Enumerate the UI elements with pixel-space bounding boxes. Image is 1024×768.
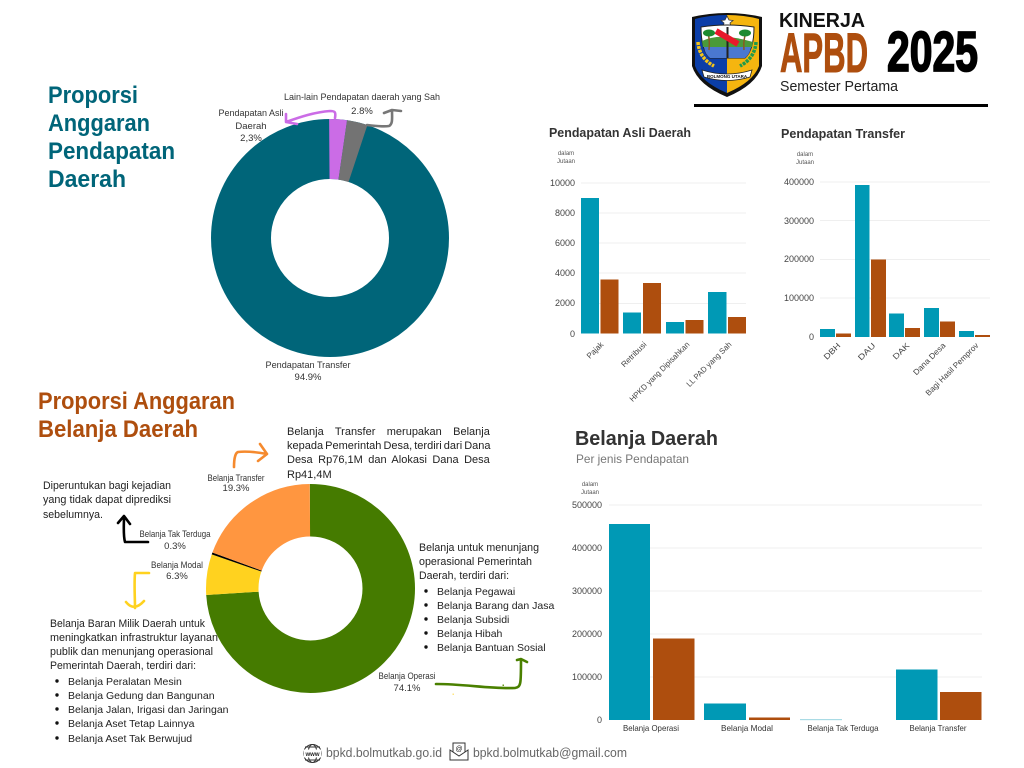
bar chart: Belanja Daerah: 300000	[572, 586, 602, 596]
bar chart: Pendapatan Transfer: 300000	[784, 216, 814, 226]
arrow: grey to Lain-lain Pendapatan	[367, 110, 401, 126]
list: jenis belanja modal: Belanja Aset Tak Berwujud	[68, 733, 192, 745]
label: Pendapatan Transfer: 94.9%	[295, 372, 322, 383]
label: Belanja Transfer	[208, 473, 264, 494]
label: Pendapatan Asli Daerah: Daerah	[235, 121, 267, 132]
text block: Belanja Operasi description: Belanja untuk menunjang	[419, 542, 539, 554]
bar chart: Pendapatan Asli Daerah: 10000	[550, 178, 575, 188]
list: jenis belanja operasi: Belanja Hibah	[437, 628, 503, 640]
bar chart: Pendapatan Asli Daerah: 4000	[555, 268, 575, 278]
list: jenis belanja modal	[55, 676, 229, 745]
chart title: Pendapatan Transfer	[781, 126, 905, 141]
label: Pendapatan Asli Daerah: Pendapatan Asli	[218, 108, 284, 119]
list: jenis belanja modal: Belanja Gedung dan Bangunan	[68, 690, 215, 702]
bar chart: Pendapatan Asli Daerah	[549, 125, 746, 404]
heading: Proporsi Anggaran Belanja Daerah	[38, 388, 235, 443]
arrow: green to Belanja Operasi text	[436, 659, 527, 688]
label: Belanja Transfer: Belanja Transfer	[208, 473, 264, 484]
chart title: Belanja Daerah	[575, 428, 718, 450]
icon: globe www: www	[304, 752, 320, 758]
bar chart: Pendapatan Transfer: 400000	[784, 177, 814, 187]
bar chart: Pendapatan Transfer: DAU	[856, 341, 878, 362]
text block: Belanja Tak Terduga description	[43, 480, 171, 521]
bar chart: Pendapatan Asli Daerah: HPKD yang Dipisahkan	[628, 340, 691, 404]
list: jenis belanja operasi: Belanja Pegawai	[437, 586, 515, 598]
icon: globe www	[304, 744, 322, 762]
label: Belanja Modal	[151, 560, 203, 582]
list: jenis belanja operasi: Belanja Bantuan Sosial	[437, 642, 546, 654]
bar chart: Belanja Daerah: 500000	[572, 500, 602, 510]
icon: envelope with at sign	[450, 743, 468, 760]
text block: Belanja Transfer description: Desa Rp76,1M dan Alokasi Dana Desa	[287, 454, 491, 466]
label: Lain-lain Pendapatan daerah yang Sah: 2.8%	[351, 106, 373, 117]
icon: regional coat of arms shield: BOLMONG UTARA	[707, 74, 748, 79]
arrow: orange to Belanja Transfer text	[234, 444, 267, 467]
unit note	[796, 152, 814, 166]
website: bpkd.bolmutkab.go.id	[326, 745, 442, 760]
bar chart: Pendapatan Asli Daerah: LL PAD yang Sah	[685, 340, 733, 389]
header	[692, 10, 988, 107]
text block: Belanja Modal description	[50, 618, 229, 745]
email: bpkd.bolmutkab@gmail.com	[473, 745, 627, 760]
text block: Belanja Tak Terduga description: Diperuntukan bagi kejadian	[43, 480, 171, 492]
list: jenis belanja operasi: Belanja Barang dan Jasa	[437, 600, 554, 612]
bar chart: Belanja Daerah	[572, 428, 982, 733]
list: jenis belanja operasi	[424, 586, 554, 654]
unit note: Jutaan	[557, 159, 575, 165]
unit note: dalam	[797, 152, 813, 158]
text block: Belanja Transfer description: kepada Pemerintah Desa, terdiri dari Dana	[287, 440, 491, 452]
text block: Belanja Operasi description: Daerah, terdiri dari:	[419, 570, 509, 582]
text block: Belanja Transfer description	[287, 426, 491, 481]
bar chart: Pendapatan Transfer: 0	[809, 332, 814, 342]
bar chart: Belanja Daerah: 100000	[572, 672, 602, 682]
label: Belanja Modal: Belanja Modal	[151, 560, 203, 571]
arrow: purple to Pendapatan Asli Daerah	[286, 111, 335, 124]
list: jenis belanja modal: Belanja Peralatan Mesin	[68, 676, 182, 688]
unit note	[581, 482, 599, 496]
unit note: dalam	[582, 482, 598, 488]
label: Belanja Tak Terduga: Belanja Tak Terduga	[140, 529, 211, 540]
label: Belanja Modal: 6.3%	[166, 571, 188, 582]
bar chart: Pendapatan Transfer: Bagi Hasil Pemprov	[924, 341, 980, 398]
arrow: black to Belanja Tak Terduga text	[118, 516, 148, 542]
heading: Proporsi Anggaran Pendapatan Daerah: Pendapatan	[48, 138, 175, 165]
list: jenis belanja operasi: Belanja Subsidi	[437, 614, 509, 626]
label: Pendapatan Asli Daerah: 2,3%	[240, 133, 262, 144]
bar chart: Belanja Daerah: 0	[597, 715, 602, 725]
heading: Proporsi Anggaran Pendapatan Daerah: Daerah	[48, 166, 126, 193]
bar chart: Pendapatan Transfer: Dana Desa	[911, 341, 948, 377]
donut chart: pendapatan daerah	[241, 149, 419, 327]
unit note: Jutaan	[581, 490, 599, 496]
label: Belanja Transfer: 19.3%	[223, 483, 250, 494]
text block: Belanja Operasi description	[419, 542, 554, 654]
unit note	[557, 151, 575, 165]
bar chart: Pendapatan Transfer: 100000	[784, 293, 814, 303]
bar chart: Pendapatan Transfer: DAK	[891, 340, 912, 362]
bar chart: Belanja Daerah: Belanja Operasi	[623, 723, 679, 733]
heading: Proporsi Anggaran Belanja Daerah: Proporsi Anggaran	[38, 388, 235, 415]
text block: Belanja Transfer description: Belanja Transfer merupakan Belanja	[287, 426, 491, 438]
title: 2025: 2025	[887, 20, 978, 84]
heading: Proporsi Anggaran Pendapatan Daerah: Anggaran	[48, 110, 150, 137]
label: Belanja Operasi	[378, 671, 436, 694]
bar chart: Belanja Daerah: Belanja Tak Terduga	[808, 723, 879, 733]
label: Belanja Operasi: Belanja Operasi	[378, 671, 436, 682]
label: Pendapatan Transfer: Pendapatan Transfer	[266, 360, 350, 371]
label: Pendapatan Transfer	[266, 360, 350, 383]
bar chart: Pendapatan Transfer	[781, 126, 990, 398]
heading: Proporsi Anggaran Belanja Daerah: Belanja Daerah	[38, 416, 198, 443]
label: Belanja Tak Terduga: 0.3%	[164, 541, 186, 552]
bar chart: Pendapatan Asli Daerah: 8000	[555, 208, 575, 218]
text block: Belanja Transfer description: Rp41,4M	[287, 469, 332, 481]
chart subtitle: Per jenis Pendapatan	[576, 452, 689, 466]
text block: Belanja Modal description: publik dan menunjang operasional	[50, 646, 213, 658]
arrow: yellow to Belanja Modal text	[126, 573, 149, 608]
text block: Belanja Tak Terduga description: sebelumnya.	[43, 509, 103, 521]
label: Belanja Operasi: 74.1%	[394, 683, 421, 694]
chart title: Pendapatan Asli Daerah	[549, 125, 691, 140]
text block: Belanja Operasi description: operasional Pemerintah	[419, 556, 532, 568]
bar chart: Pendapatan Asli Daerah: Pajak	[585, 339, 606, 361]
bar chart: Belanja Daerah: 200000	[572, 629, 602, 639]
label: Pendapatan Asli Daerah	[218, 108, 284, 144]
title: APBD: APBD	[780, 21, 868, 84]
text block: Belanja Modal description: Belanja Baran Milik Daerah untuk	[50, 618, 205, 630]
heading: Proporsi Anggaran Pendapatan Daerah	[48, 82, 175, 193]
label: Belanja Tak Terduga	[140, 529, 211, 552]
footer: contact	[304, 743, 627, 762]
text block: Belanja Tak Terduga description: yang tidak dapat diprediksi	[43, 494, 171, 506]
heading: Proporsi Anggaran Pendapatan Daerah: Proporsi	[48, 82, 138, 109]
list: jenis belanja modal: Belanja Aset Tetap Lainnya	[68, 718, 195, 730]
text block: Belanja Modal description: meningkatkan infrastruktur layanan	[50, 632, 218, 644]
list: jenis belanja modal: Belanja Jalan, Irigasi dan Jaringan	[68, 704, 229, 716]
bar chart: Pendapatan Asli Daerah: 0	[570, 329, 575, 339]
bar chart: Pendapatan Asli Daerah: Retribusi	[619, 340, 649, 369]
bar chart: Pendapatan Transfer: DBH	[822, 341, 843, 362]
bar chart: Pendapatan Asli Daerah: 2000	[555, 298, 575, 308]
icon: envelope with at sign: @	[455, 746, 463, 753]
title: KINERJA: KINERJA	[779, 10, 865, 32]
bar chart: Belanja Daerah: Belanja Transfer	[910, 723, 967, 733]
unit note: Jutaan	[796, 160, 814, 166]
bar chart: Belanja Daerah: Belanja Modal	[721, 723, 773, 733]
unit note: dalam	[558, 151, 574, 157]
text block: Belanja Modal description: Pemerintah Daerah, terdiri dari:	[50, 660, 196, 672]
label: Lain-lain Pendapatan daerah yang Sah	[284, 92, 440, 117]
bar chart: Pendapatan Transfer: 200000	[784, 254, 814, 264]
subtitle: Semester Pertama: Semester Pertama	[780, 79, 899, 95]
bar chart: Belanja Daerah: 400000	[572, 543, 602, 553]
donut chart: belanja daerah	[232, 510, 389, 667]
label: Lain-lain Pendapatan daerah yang Sah: Lain-lain Pendapatan daerah yang Sah	[284, 92, 440, 103]
bar chart: Pendapatan Asli Daerah: 6000	[555, 238, 575, 248]
icon: regional coat of arms shield	[692, 13, 762, 97]
